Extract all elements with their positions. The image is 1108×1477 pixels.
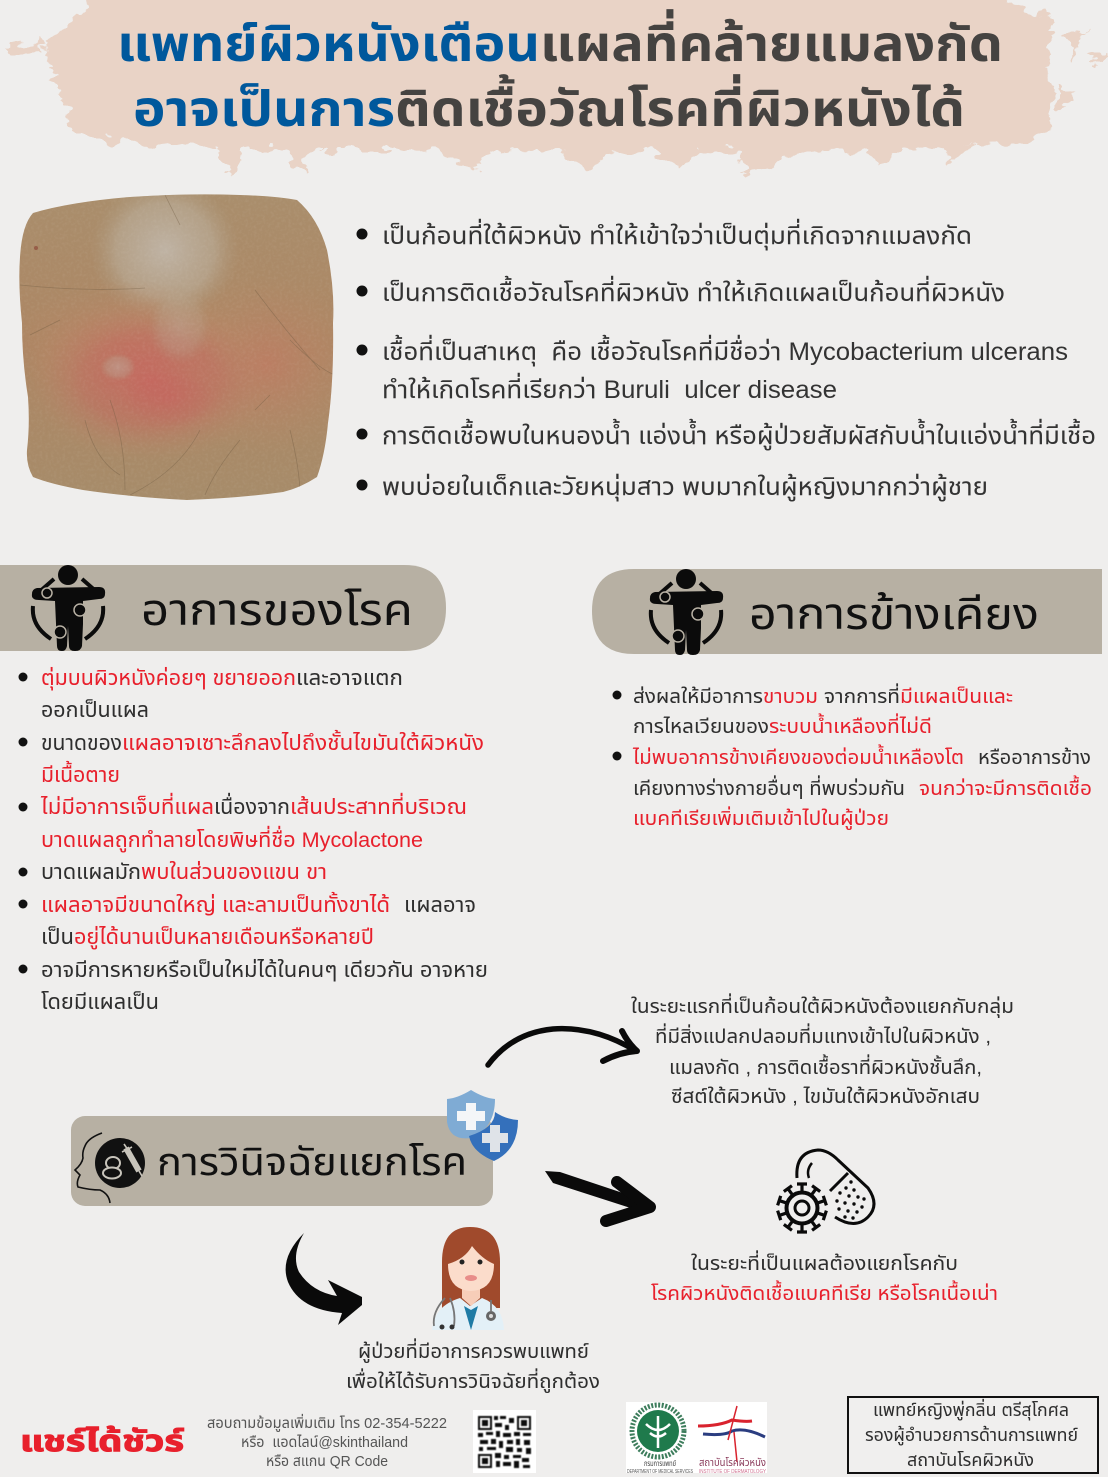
heading: symptoms: อาการของโรค — [141, 586, 413, 635]
logo: ministry emblem: กรมการแพทย์ — [644, 1459, 676, 1468]
arrow: down to doctor — [286, 1233, 362, 1325]
icon: head with pills and syringe — [75, 1133, 145, 1203]
logo: ministry emblem — [627, 1405, 693, 1475]
symptoms list: แผลอาจมีขนาดใหญ่ และลามเป็นทั้งขาได้ — [41, 891, 390, 917]
symptoms list: โดยมีแผลเป็น — [41, 991, 159, 1014]
side effects list: เคียงทางร่างกายอื่นๆ ที่พบร่วมกัน — [633, 775, 905, 800]
side effects list: ขาบวม — [763, 686, 818, 708]
differential text: early stage: ที่มีสิ่งแปลกปลอมที่มแทงเข้าไปในผิวหนัง , — [655, 1023, 991, 1048]
title: ติดเชื้อวัณโรคที่ผิวหนังได้ — [395, 74, 965, 137]
symptoms list: เนื่องจาก — [214, 792, 290, 819]
symptoms list: ออกเป็นแผล — [41, 699, 149, 722]
footer: author box: รองผู้อำนวยการด้านการแพทย์ — [865, 1425, 1078, 1447]
logo: institute of dermatology: INSTITUTE OF DERMATOLOGY — [699, 1469, 767, 1475]
symptoms list: แผลอาจ — [404, 894, 476, 917]
late stage text: โรคผิวหนังติดเชื้อแบคทีเรีย หรือโรคเนื้อเน่า — [651, 1280, 998, 1305]
footer: logos — [626, 1402, 767, 1475]
intro bullet list: ทำให้เกิดโรคที่เรียกว่า Buruli ulcer disease — [382, 372, 837, 404]
icon: capsule and virus — [778, 1150, 874, 1232]
symptoms list — [18, 666, 488, 1014]
symptoms list: เป็น — [41, 926, 74, 949]
photo: skin lesion — [19, 194, 334, 500]
icon: person with lesions, right — [650, 569, 723, 655]
side effects list: ระบบน้ำเหลืองที่ไม่ดี — [769, 713, 932, 738]
late stage text — [651, 1250, 998, 1305]
arrow: curved to early stage — [488, 1029, 637, 1065]
symptoms list: บาดแผลมัก — [41, 861, 141, 884]
doctor advice text: เพื่อให้ได้รับการวินิจฉัยที่ถูกต้อง — [346, 1368, 600, 1394]
symptoms list: มีเนื้อตาย — [41, 760, 120, 787]
title — [117, 9, 1003, 137]
intro bullet list: เป็นการติดเชื้อวัณโรคที่ผิวหนัง ทำให้เกิดแผลเป็นก้อนที่ผิวหนัง — [382, 275, 1005, 307]
footer: contact — [207, 1413, 447, 1470]
icon: doctor — [432, 1227, 504, 1330]
icon: person with lesions — [32, 565, 105, 651]
heading: differential diagnosis — [71, 1116, 493, 1206]
side effects list: มีแผลเป็นและ — [900, 686, 1013, 708]
heading: symptoms — [0, 565, 446, 651]
title: แผลที่คล้ายแมลงกัด — [540, 9, 1003, 72]
side effects list: หรืออาการข้าง — [978, 746, 1091, 769]
side effects list — [612, 683, 1092, 831]
logo: ministry emblem: DEPARTMENT OF MEDICAL SERVICES — [627, 1469, 693, 1475]
intro bullet list: การติดเชื้อพบในหนองน้ำ แอ่งน้ำ หรือผู้ป่วยสัมผัสกับน้ำในแอ่งน้ำที่มีเชื้อ — [382, 418, 1096, 451]
title: แพทย์ผิวหนังเตือน — [117, 16, 540, 72]
arrow: straight to bacteria — [545, 1171, 653, 1221]
footer: contact: หรือ สแกน QR Code — [266, 1453, 388, 1470]
differential text: early stage: ซีสต์ใต้ผิวหนัง , ไขมันใต้ผิวหนังอักเสบ — [671, 1085, 980, 1108]
symptoms list: ขนาดของ — [41, 732, 122, 755]
differential text: early stage — [631, 993, 1014, 1108]
side effects list: จนกว่าจะมีการติดเชื้อ — [919, 775, 1092, 800]
footer: author box: สถาบันโรคผิวหนัง — [907, 1450, 1034, 1470]
symptoms list: ตุ่มบนผิวหนังค่อยๆ ขยายออก — [41, 666, 296, 691]
differential text: early stage: แมลงกัด , การติดเชื้อราที่ผิวหนังชั้นลึก, — [669, 1054, 982, 1079]
doctor advice text: ผู้ป่วยที่มีอาการควรพบแพทย์ — [358, 1338, 589, 1364]
side effects list: ส่งผลให้มีอาการ — [633, 685, 763, 708]
side effects list: จากการที่ — [824, 683, 900, 708]
symptoms list: ไม่มีอาการเจ็บที่แผล — [40, 792, 214, 819]
intro bullet list: พบบ่อยในเด็กและวัยหนุ่มสาว พบมากในผู้หญิงมากกว่าผู้ชาย — [382, 473, 988, 502]
footer: author box: แพทย์หญิงพู่กลิ่น ตรีสุโกศล — [873, 1398, 1069, 1422]
heading: side effects: อาการข้างเคียง — [749, 590, 1039, 639]
footer: contact: สอบถามข้อมูลเพิ่มเติม โทร 02-354-5222 — [207, 1413, 447, 1432]
symptoms list: อาจมีการหายหรือเป็นใหม่ได้ในคนๆ เดียวกัน อาจหาย — [41, 958, 488, 982]
symptoms list: เส้นประสาทที่บริเวณ — [290, 792, 467, 819]
symptoms list: แผลอาจเซาะลึกลงไปถึงชั้นไขมันใต้ผิวหนัง — [122, 729, 484, 755]
side effects list: ไม่พบอาการข้างเคียงของต่อมน้ำเหลืองโต — [632, 744, 964, 769]
intro bullet list — [356, 218, 1096, 502]
differential text: early stage: ในระยะแรกที่เป็นก้อนใต้ผิวหนังต้องแยกกับกลุ่ม — [631, 993, 1014, 1018]
title banner brush stroke — [10, 0, 1108, 178]
footer: contact: หรือ แอดไลน์@skinthailand — [241, 1434, 408, 1451]
icon: medical shields — [447, 1090, 518, 1161]
footer: author box — [848, 1397, 1098, 1473]
side effects list: การไหลเวียนของ — [633, 716, 769, 738]
title: อาจเป็นการ — [133, 81, 395, 137]
side effects list: แบคทีเรียเพิ่มเติมเข้าไปในผู้ป่วย — [633, 806, 889, 831]
logo: institute of dermatology — [698, 1406, 767, 1475]
late stage text: ในระยะที่เป็นแผลต้องแยกโรคกับ — [691, 1250, 958, 1275]
heading: differential diagnosis: การวินิจฉัยแยกโรค — [157, 1142, 467, 1184]
symptoms list: อยู่ได้นานเป็นหลายเดือนหรือหลายปี — [74, 925, 374, 950]
logo: institute of dermatology: สถาบันโรคผิวหนัง — [699, 1457, 766, 1469]
doctor advice text — [346, 1338, 600, 1394]
heading: side effects — [592, 569, 1102, 655]
intro bullet list: เป็นก้อนที่ใต้ผิวหนัง ทำให้เข้าใจว่าเป็นตุ่มที่เกิดจากแมลงกัด — [382, 218, 972, 251]
intro bullet list: เชื้อที่เป็นสาเหตุ คือ เชื้อวัณโรคที่มีชื่อว่า Mycobacterium ulcerans — [382, 334, 1068, 367]
symptoms list: บาดแผลถูกทำลายโดยพิษที่ชื่อ Mycolactone — [41, 825, 423, 853]
footer: QR code — [473, 1410, 536, 1473]
symptoms list: และอาจแตก — [296, 667, 403, 690]
symptoms list: พบในส่วนของแขน ขา — [141, 860, 327, 884]
footer: share slogan: แชร์ได้ชัวร์ — [20, 1426, 184, 1458]
